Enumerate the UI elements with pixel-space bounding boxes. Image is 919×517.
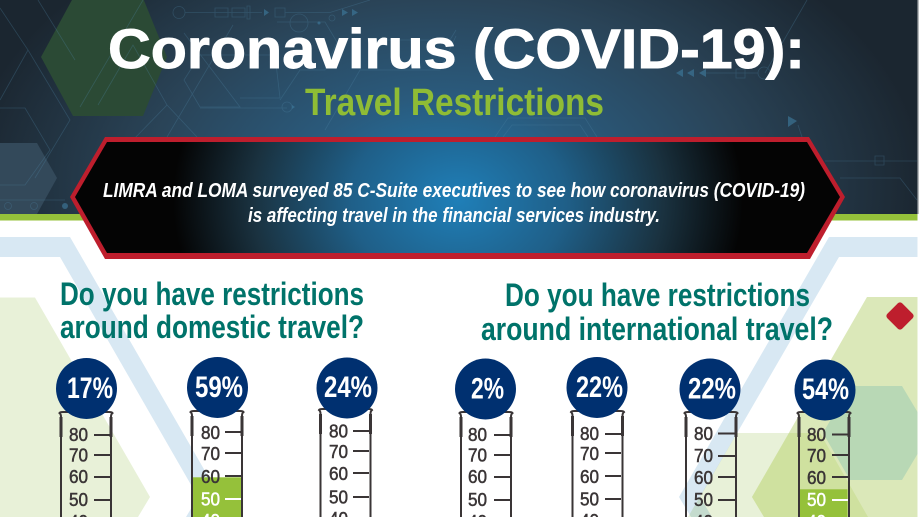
gauge: international 22% (second): 70 xyxy=(694,446,713,466)
gauge: international 2%: 60 xyxy=(468,467,487,487)
gauge: international 54%: 54% xyxy=(802,373,849,406)
gauge: international 2%: 2% xyxy=(471,372,504,406)
banner text: LIMRA and LOMA surveyed 85 C-Suite executives to see how coronavirus (COVID-19) xyxy=(103,179,805,202)
gauge: domestic 17%: 50 xyxy=(69,490,88,510)
background band: right light blue xyxy=(679,237,918,517)
gauge: international 54%: 60 xyxy=(807,468,826,488)
subtitle: Travel Restrictions xyxy=(305,82,604,124)
gauge: international 2%: 80 xyxy=(468,425,487,445)
icon: red diamond xyxy=(885,301,915,331)
background hexagon: right teal xyxy=(823,386,918,480)
gauge: international 22% (first) xyxy=(566,357,628,517)
gauge: domestic 17%: 70 xyxy=(69,446,88,466)
gauge: international 54%: 70 xyxy=(807,446,826,466)
background band: left light blue xyxy=(0,237,232,517)
gauge: domestic 59%: 80 xyxy=(201,423,220,443)
background hexagon: right pale green xyxy=(688,433,868,517)
gauge: domestic 24%: 70 xyxy=(329,442,348,462)
gauge: domestic 24%: 80 xyxy=(329,422,348,442)
heading: international: Do you have restrictions xyxy=(505,277,810,313)
gauge: domestic 17%: 17% xyxy=(67,372,113,405)
gauge: international 54% xyxy=(794,360,856,517)
gauge: domestic 24%: 60 xyxy=(329,464,348,484)
gauge: international 22% (first): 60 xyxy=(580,467,599,487)
gauge: international 22% (second): 50 xyxy=(694,490,713,510)
gauge: international 22% (second): 60 xyxy=(694,468,713,488)
heading line 2: around domestic travel? xyxy=(60,309,364,345)
hexagon: slate xyxy=(0,143,57,214)
heading line 2: around international travel? xyxy=(481,311,833,347)
gauge: international 22% (second) xyxy=(680,358,740,517)
heading: domestic: Do you have restrictions xyxy=(60,276,364,312)
background hexagon: right light green xyxy=(752,297,918,517)
gauge: international 22% (second): 22% xyxy=(688,372,736,406)
gauge: domestic 59% xyxy=(187,357,248,517)
gauge: domestic 17% xyxy=(56,358,117,517)
gauge: domestic 59%: 59% xyxy=(195,371,243,404)
gauge: international 54%: 50 xyxy=(807,490,826,510)
gauge: domestic 17%: 80 xyxy=(69,425,88,445)
gauge: international 2%: 70 xyxy=(468,446,487,466)
banner fill xyxy=(75,142,840,253)
background hexagon: left pale green xyxy=(0,298,150,517)
gauge: international 22% (first): 50 xyxy=(580,490,599,510)
gauge: international 22% (second): 80 xyxy=(694,424,713,444)
gauge: international 22% (first): 80 xyxy=(580,424,599,444)
circuit arrowheads xyxy=(62,9,797,209)
banner border xyxy=(70,137,845,259)
intro banner xyxy=(70,137,845,259)
gauge: international 22% (first): 22% xyxy=(576,371,623,404)
gauge: domestic 59%: 60 xyxy=(201,467,220,487)
right edge sliver xyxy=(918,0,919,214)
banner text line 2: is affecting travel in the financial services industry. xyxy=(248,204,660,227)
hexagon: dark green xyxy=(41,0,167,116)
gauge: domestic 59%: 50 xyxy=(201,490,220,510)
title: Coronavirus (COVID-19): xyxy=(108,17,805,80)
gauge: domestic 24%: 24% xyxy=(324,371,372,404)
background hexagon: overlap green xyxy=(752,433,868,517)
green divider strip xyxy=(0,214,918,220)
gauge: domestic 24%: 50 xyxy=(329,488,348,508)
header panel xyxy=(0,0,918,214)
gauge: domestic 24% xyxy=(316,358,378,517)
gauge: domestic 17%: 60 xyxy=(69,467,88,487)
heading: international xyxy=(481,277,833,347)
gauge: international 2% xyxy=(455,358,516,517)
gauge: international 22% (first): 70 xyxy=(580,444,599,464)
heading: domestic xyxy=(60,276,364,345)
circuit pattern xyxy=(0,0,917,210)
gauge: international 54%: 80 xyxy=(807,425,826,445)
gauge: international 2%: 50 xyxy=(468,490,487,510)
gauge: domestic 59%: 70 xyxy=(201,444,220,464)
